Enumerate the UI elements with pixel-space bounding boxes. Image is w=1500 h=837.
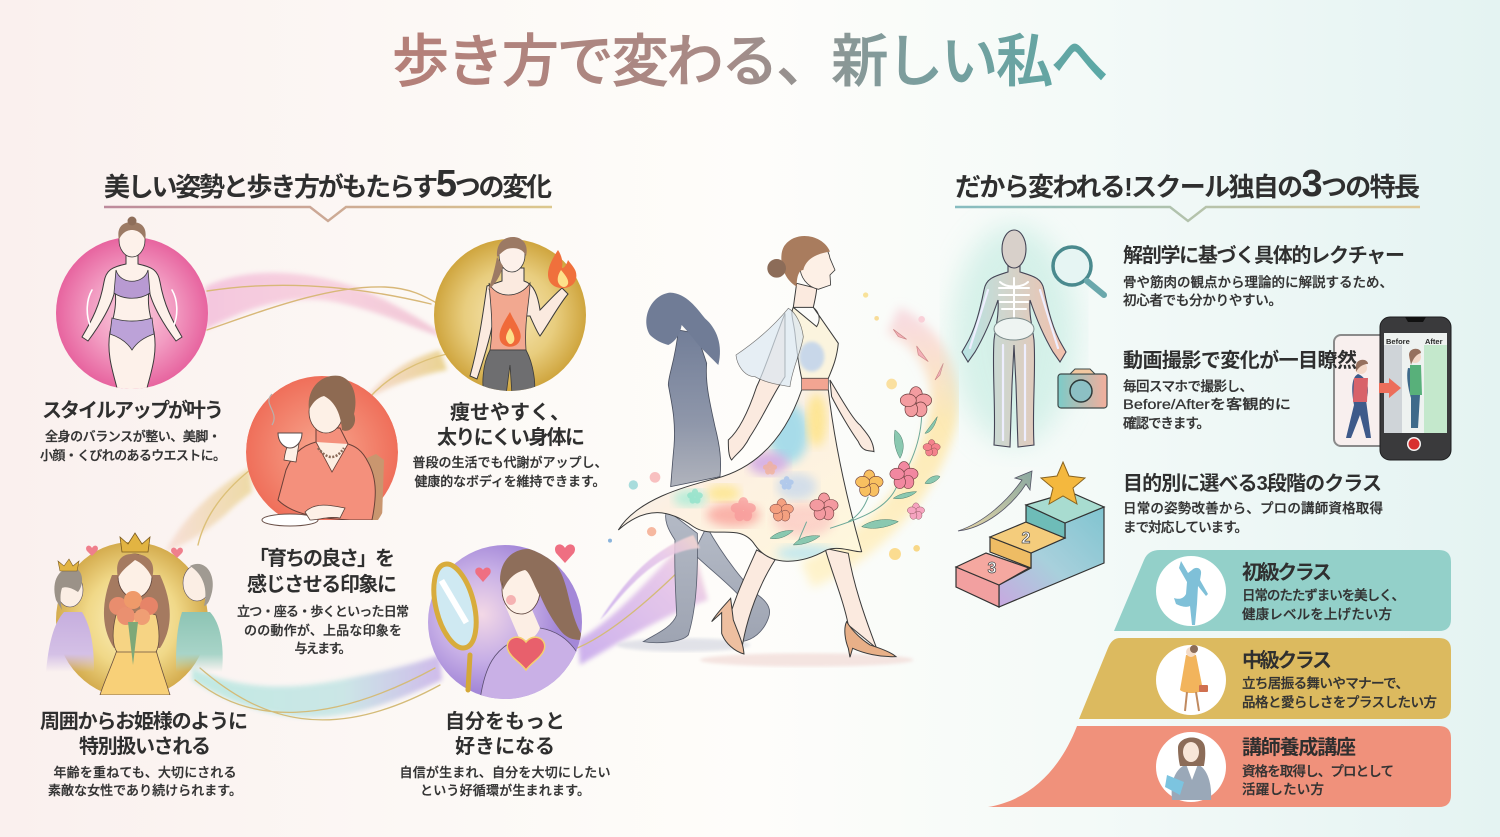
heading and description: スタイルアップが叶う [42,398,224,422]
class text [1242,561,1405,622]
icon: stairs with star: 3 [988,560,997,577]
class text: 資格を取得し、プロとして [1242,764,1394,779]
heading and description: 素敵な女性であり続けられます。 [48,783,242,798]
class text: 活躍したい方 [1242,782,1324,797]
heading and description [40,398,226,463]
panel: intermediate class [1079,638,1451,719]
class text: 中級クラス [1242,649,1332,672]
heading and description: 感じさせる印象に [247,572,397,596]
class text [1242,735,1394,797]
feature 3 text: まで対応しています。 [1123,520,1248,535]
heading and description: 全身のバランスが整い、美脚・ [45,429,221,444]
heading and description: 好きになる [455,735,555,758]
feature 3 text: 目的別に選べる3段階のクラス [1123,472,1382,495]
heading and description: 年齢を重ねても、大切にされる [54,765,236,780]
feature 1 text: 骨や筋肉の観点から理論的に解説するため、 [1123,274,1393,290]
legs [712,548,896,657]
arms and sleeve [728,308,874,460]
section heading: five changes: 美しい姿勢と歩き方がもたらす5つの変化 [104,163,552,205]
class text: 初級クラス [1242,561,1332,584]
heading and description: 与えます。 [294,641,352,656]
class text: 日常のたたずまいを美しく、 [1242,588,1405,603]
heading and description: 立つ・座る・歩くといった日常 [237,604,409,619]
feature 2 text: 確認できます。 [1123,416,1210,431]
feature 2 text: Before/Afterを客観的に [1123,396,1291,412]
central illustration: walking women [600,236,945,667]
ground shadow [617,638,913,667]
heading and description: 自分をもっと [445,710,565,733]
class text [1242,649,1437,710]
heading and description: 周囲からお姫様のように [40,710,248,733]
flowers on skirt [770,387,940,545]
icon: crowned woman with bouquet and admirers [46,533,223,698]
heading and description: 「育ちの良さ」を [249,547,395,570]
icon: stairs with star [956,462,1104,607]
icon: stairs with star: 2 [1022,530,1031,547]
heading and description: 普段の生活でも代謝がアップし、 [412,455,608,470]
heading and description: のの動作が、上品な印象を [244,623,402,638]
icon: anatomy figure [952,225,1076,447]
class text: 立ち居振る舞いやマナーで、 [1242,676,1409,691]
shadow figure: past self [643,293,770,643]
icon: figure with flame in gold circle [434,237,586,395]
class text: 健康レベルを上げたい方 [1242,606,1392,622]
feature 2 text: 毎回スマホで撮影し、 [1123,378,1253,394]
feature 2 text: 動画撮影で変化が一目瞭然 [1123,348,1357,372]
benefit 2: easy to slim [412,237,608,489]
feature 1 text [1123,244,1405,308]
heading and description [412,401,608,489]
heading and description [40,710,248,798]
icon: body figure in pink circle [56,216,208,392]
icon: smartphones before and after [1334,317,1451,460]
feature 3 text [1123,472,1383,535]
heading and description: 特別扱いされる [79,735,211,758]
ribbons connecting the benefits [165,273,708,720]
icon: smartphones before and after: Before [1386,337,1410,346]
title: 歩き方で変わる、新しい私へ [392,30,1108,94]
icon: instructor [1156,732,1226,802]
icon: woman with teacup in coral circle [246,376,398,528]
icon: woman with mirror in purple circle [426,544,590,700]
head [767,236,835,307]
icon: smartphones before and after: After [1425,337,1443,346]
heading and description [237,547,409,656]
section heading: three features: だから変われる!スクール独自の3つの特長 [955,163,1420,205]
rainbow swoosh behind dress [807,320,945,575]
heading and description: 健康的なボディを維持できます。 [414,474,606,489]
feature 1 text: 初心者でも分かりやすい。 [1123,293,1282,308]
benefit 5: love yourself [400,544,610,798]
icon: magnifying glass [1053,247,1104,295]
heading and description: 痩せやすく、 [450,401,570,424]
panel: beginner class [1114,550,1451,631]
icon: woman in dress [1156,645,1226,715]
feature 1 text: 解剖学に基づく具体的レクチャー [1123,244,1405,267]
panel: instructor course [988,726,1451,807]
heading and description: 自信が生まれ、自分を大切にしたい [400,765,610,780]
dress [618,307,862,562]
lilac swoosh foreground [600,535,700,620]
heading and description: という好循環が生まれます。 [420,783,590,798]
class text: 品格と愛らしさをプラスしたい方 [1242,695,1437,710]
icon: camera [1058,369,1107,408]
heading and description [400,710,610,798]
benefit 1: style up [40,216,226,463]
benefit 4: treated like a princess [40,533,248,798]
benefit 3: refined impression [237,376,409,656]
feature 2 text [1123,348,1357,431]
feature 3 text: 日常の姿勢改善から、プロの講師資格取得 [1123,500,1383,516]
heading and description: 太りにくい身体に [437,426,585,449]
icon: dancer [1156,556,1226,626]
class text: 講師養成講座 [1242,735,1356,759]
heading and description: 小顔・くびれのあるウエストに。 [40,448,226,463]
petals and sparkles [608,292,943,560]
